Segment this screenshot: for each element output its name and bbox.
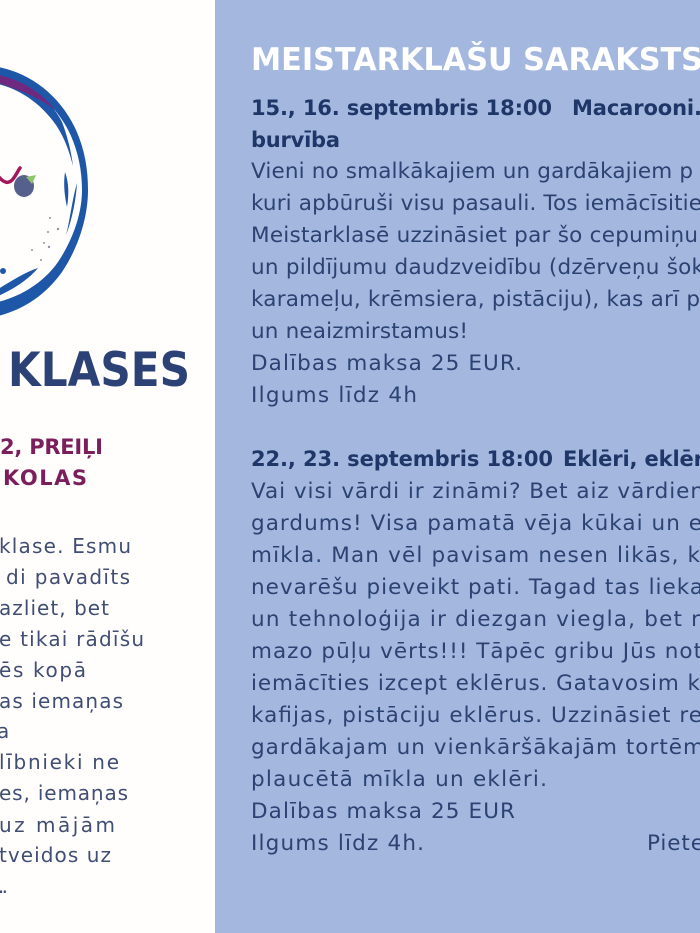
description: eclair: gardums! Visa pamatā vēja kūkai un e [251,511,700,536]
description: eclair: nevarēšu pieveikt pati. Tagad tas lieka [251,575,700,600]
text block: eclair class [251,447,700,856]
description: macaroon: Ilgums līdz 4h [251,383,417,408]
text block: introduction: lībnieki ne [0,750,119,774]
text block: macaroon class [251,96,700,408]
description: macaroon [251,159,700,408]
heading: eclair date [251,447,700,471]
text block: introduction: e tikai rādīšu [0,627,144,651]
description: eclair: plaucētā mīkla un eklēri. [251,767,547,792]
description: eclair: gardākajam un vienkāršākajām tortēm [251,735,700,760]
description: macaroon: un neaizmirstamus! [251,319,468,344]
heading: macaroon date [251,96,700,152]
icon: berry [14,175,36,197]
text block: introduction: klase. Esmu [0,534,131,558]
text block: introduction: uz mājām [0,813,115,837]
description: macaroon: Dalības maksa 25 EUR. [251,351,522,376]
subheading: location: 2, PREIĻI [0,435,103,459]
heading: macaroon date: burvība [251,128,340,152]
heading: eclair date: Eklēri, eklēr [563,447,700,471]
icon: magenta squiggle [0,168,20,182]
text block: introduction: azliet, bet [0,596,109,620]
description: macaroon: un pildījumu daudzveidību (dzērveņu šok [251,255,700,280]
description: eclair: kafijas, pistāciju eklērus. Uzzināsiet re [251,703,700,728]
text block: introduction: ēs kopā [0,658,86,682]
heading: macaroon date: 15., 16. septembris 18:00 [251,96,552,120]
description: eclair: mīkla. Man vēl pavisam nesen likās, k [251,543,700,568]
description: eclair: mazo pūļu vērts!!! Tāpēc gribu Jūs not [251,639,700,664]
speckles [0,217,59,274]
description: macaroon: karameļu, krēmsiera, pistāciju), kas arī p [251,287,700,312]
heading: eclair date: 22., 23. septembris 18:00 [251,447,553,471]
description: eclair: Dalības maksa 25 EUR [251,799,515,824]
description: macaroon: Vieni no smalkākajiem un gardākajiem p [251,159,693,184]
description: eclair: Vai visi vārdi ir zināmi? Bet aiz vārdien [251,479,700,504]
text block: introduction: di pavadīts [6,565,130,589]
description: eclair: un tehnoloģija ir diezgan viegla, bet r [251,607,700,632]
title: schedule: MEISTARKLAŠU SARAKSTS [251,41,700,78]
subheading: location [0,435,103,490]
panel: schedule background [215,0,700,933]
heading: macaroon date: Macarooni. [572,96,700,120]
description: eclair: Ilgums līdz 4h. [251,831,424,856]
description: macaroon: Meistarklasē uzzināsiet par šo cepumiņu [251,223,698,248]
text block: introduction: tveidos uz [0,843,111,867]
logo: brush circle [0,67,88,316]
text block: introduction [0,534,144,898]
text block: introduction: as iemaņas [0,689,123,713]
description: macaroon: kuri apbūruši visu pasauli. Tos iemācīsitie [251,191,700,216]
subheading: location: KOLAS [3,466,87,490]
description: eclair: iemācīties izcept eklērus. Gatavosim k [251,671,700,696]
text block: introduction: es, iemaņas [0,781,128,805]
heading: klases: KLASES [8,343,190,398]
description: eclair [251,479,700,856]
